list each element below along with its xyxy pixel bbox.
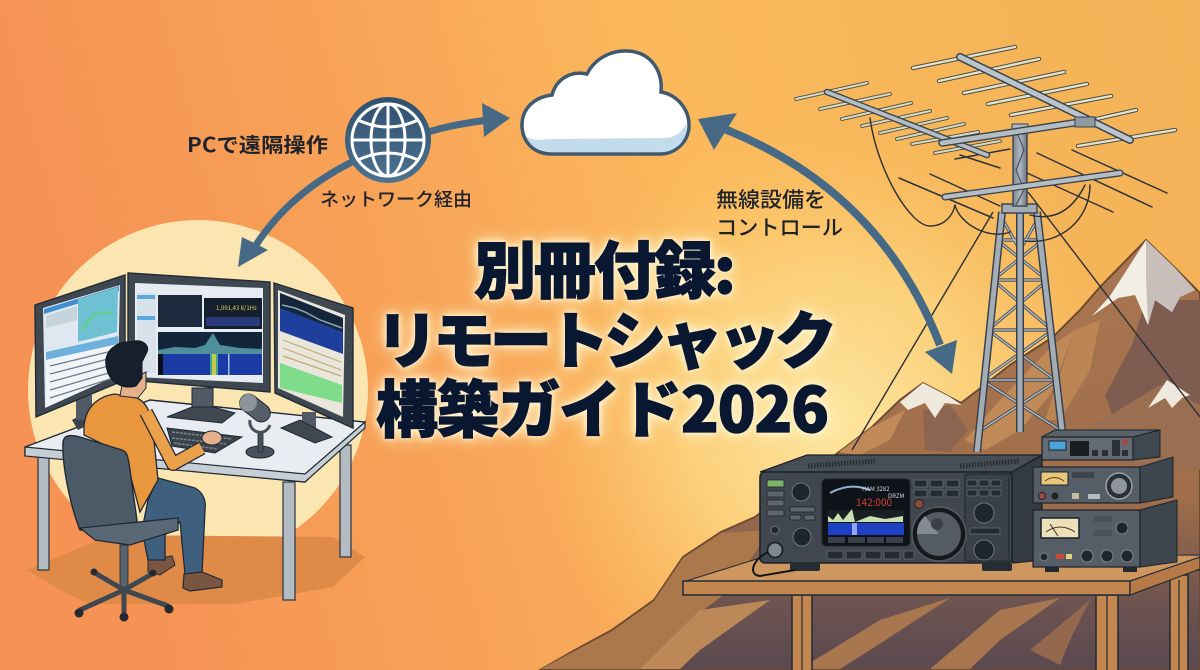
feed cables [870, 118, 1090, 241]
upper crossbar [942, 120, 1093, 143]
icon: cloud [522, 51, 689, 154]
small knobs [771, 483, 994, 560]
feet [790, 563, 820, 571]
arrow: globe to cloud [428, 103, 510, 137]
snow caps [1092, 240, 1195, 325]
center monitor screen [135, 283, 263, 383]
display [822, 479, 910, 546]
desk legs [38, 445, 351, 570]
right yagi boom [960, 57, 1130, 140]
neck and face [120, 372, 146, 398]
mountains [540, 240, 1200, 670]
third peak ridge [1085, 385, 1200, 470]
table legs [792, 575, 1188, 670]
tower lattice bracing [978, 215, 1060, 432]
mast [1013, 126, 1027, 206]
arrowhead: upper [698, 113, 737, 150]
label: control radio equipment [716, 184, 843, 242]
desk [25, 400, 365, 600]
hand [202, 431, 222, 445]
hair [106, 341, 148, 387]
lower crossbar [945, 173, 1120, 197]
office chair [63, 436, 178, 622]
shaded right face [1105, 300, 1200, 450]
arc arrow: cloud to radio equipment [698, 113, 957, 374]
right monitor [274, 283, 353, 443]
front panel buttons [827, 480, 1001, 559]
middle amplifier unit [1033, 457, 1173, 503]
arrowhead: lower [925, 340, 957, 374]
microphone [236, 390, 274, 458]
title: リモートシャック [376, 291, 832, 381]
main transceiver [753, 455, 1042, 576]
display readout: HAM 3282 [862, 484, 890, 493]
main tuning knob [912, 507, 966, 561]
frequency readout on screen: 1,991,43 8/1Hz [216, 303, 257, 312]
tower top plate [1002, 204, 1037, 213]
left monitor [35, 275, 125, 430]
torso [84, 394, 158, 512]
left yagi elements [796, 83, 1000, 153]
left yagi boom [827, 92, 987, 155]
sunlit left slope [541, 530, 770, 669]
main transceiver: 142:000 [856, 494, 893, 509]
radio table [683, 555, 1200, 670]
label: via network: ネットワーク経由 [320, 186, 472, 212]
far shoe [148, 556, 175, 575]
thin lower elements [899, 149, 1167, 218]
title: 構築ガイド2026 [376, 360, 828, 450]
main transceiver: DRZM [888, 491, 904, 500]
label: PC remote operation: PCで遠隔操作 [187, 129, 328, 158]
right yagi elements [913, 47, 1175, 146]
jeans [142, 478, 205, 574]
label: control radio equipment: コントロール [716, 212, 843, 242]
keyboard [167, 428, 242, 453]
under-table streaks [640, 600, 770, 669]
person at the desk [84, 341, 222, 591]
title: 別冊付録: [474, 221, 734, 311]
antenna tower [977, 124, 1062, 452]
label: control radio equipment: 無線設備を [716, 184, 826, 214]
icon: network globe [345, 97, 431, 183]
guy wires [852, 192, 1200, 450]
center monitor [128, 273, 270, 423]
arm [146, 412, 202, 464]
small top unit [1042, 430, 1160, 460]
left buttons [767, 480, 815, 520]
floor shadow [27, 535, 365, 604]
lower power unit [1033, 500, 1177, 572]
table top [683, 555, 1200, 582]
antennas [796, 47, 1175, 241]
tower legs [977, 212, 1062, 452]
cream circle behind the desk [28, 220, 368, 560]
left monitor screen [43, 285, 120, 408]
near shoe [183, 572, 222, 591]
arrow: globe to desk [238, 162, 352, 267]
right monitor screen [278, 290, 345, 417]
title [365, 221, 838, 450]
connector and cable [768, 542, 782, 558]
